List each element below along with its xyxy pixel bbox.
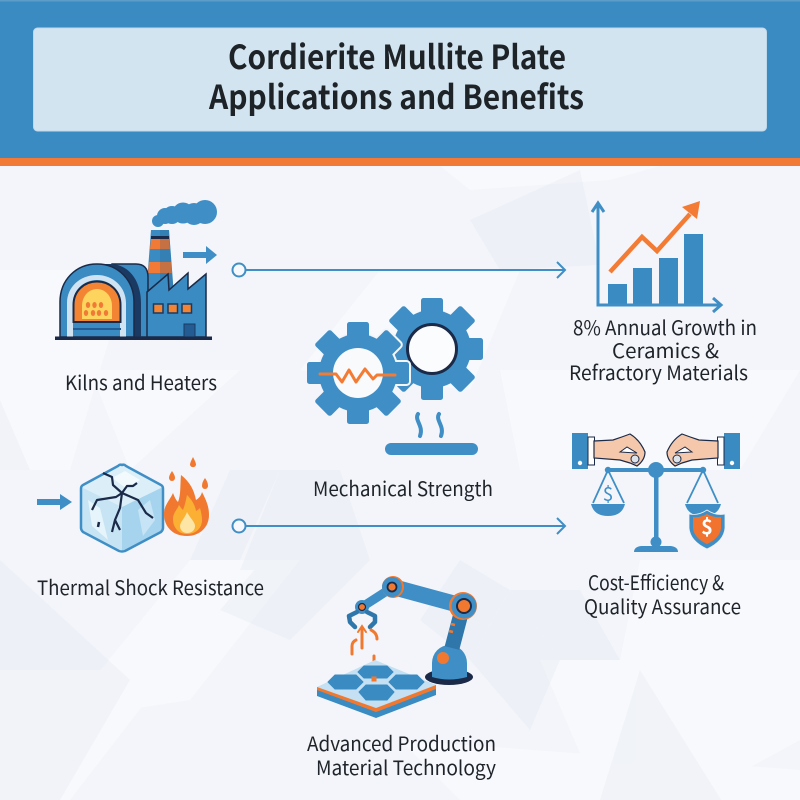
trend arrow: [610, 214, 690, 272]
hexagon plate: [317, 660, 436, 718]
label: Cost-Efficiency: [584, 567, 741, 620]
label: 8% Annual Growth: Ceramics &: [612, 335, 719, 364]
title: [208, 31, 584, 119]
icon: cracked ice cube: [81, 465, 163, 552]
scale stand and beam: [605, 462, 706, 552]
robot base: [425, 669, 473, 685]
orange motion arrows: [352, 626, 377, 668]
label: Cost-Efficiency: Quality Assurance: [584, 591, 741, 620]
icon: robot arm over plate: [317, 576, 477, 718]
icon: kiln and factory: [55, 200, 217, 340]
right pan: [685, 470, 721, 516]
shield: [689, 510, 725, 549]
robot arm: [362, 587, 463, 648]
bars: [608, 234, 703, 305]
arrow: [183, 246, 217, 264]
label: Advanced Production: [307, 728, 497, 781]
right hand: [667, 433, 740, 469]
label: Advanced Production: Material Technology: [316, 752, 497, 781]
left pan: [591, 470, 625, 516]
icon: arrow into cube: [37, 494, 72, 510]
left hand: [572, 433, 645, 469]
label: Thermal Shock Resistance: Thermal Shock Resistance: [37, 572, 264, 601]
icon: gears and heat: [307, 298, 483, 455]
label: 8% Annual Growth: [569, 312, 757, 386]
left pan: $: [603, 480, 613, 507]
header band: [0, 0, 800, 166]
right gear: [381, 298, 483, 400]
title: Applications and Benefits: [208, 71, 584, 119]
title: Cordierite Mullite Plate: [228, 31, 566, 79]
chimney: [146, 230, 174, 296]
cracks: [92, 473, 153, 532]
heat plate: [385, 414, 478, 455]
left gear: [307, 322, 409, 424]
kiln firebox: [74, 282, 120, 322]
label: 8% Annual Growth: Refractory Materials: [569, 357, 748, 386]
resistance line: [320, 369, 395, 382]
shield: $: [701, 511, 713, 540]
factory building: [147, 273, 206, 337]
connector arrow: kilns to growth: [232, 262, 565, 278]
axes: [592, 203, 721, 312]
title panel: [34, 28, 766, 131]
label: Mechanical Strength: Mechanical Strength: [313, 473, 493, 502]
gripper: [349, 612, 375, 627]
icon: flame: [164, 457, 209, 536]
icon: hands and balance scale: [572, 433, 740, 552]
label: Advanced Production: Advanced Production: [307, 728, 496, 757]
robot joints: [355, 576, 477, 620]
label: 8% Annual Growth: 8% Annual Growth in: [573, 312, 757, 341]
label: Kilns and Heaters: Kilns and Heaters: [65, 367, 217, 396]
kiln tunnel: [100, 264, 148, 337]
smoke cloud: [152, 200, 217, 227]
icon: growth chart: [592, 201, 721, 312]
label: Cost-Efficiency: Cost-Efficiency &: [588, 567, 724, 596]
connector arrow: thermal shock to cost: [232, 518, 565, 534]
